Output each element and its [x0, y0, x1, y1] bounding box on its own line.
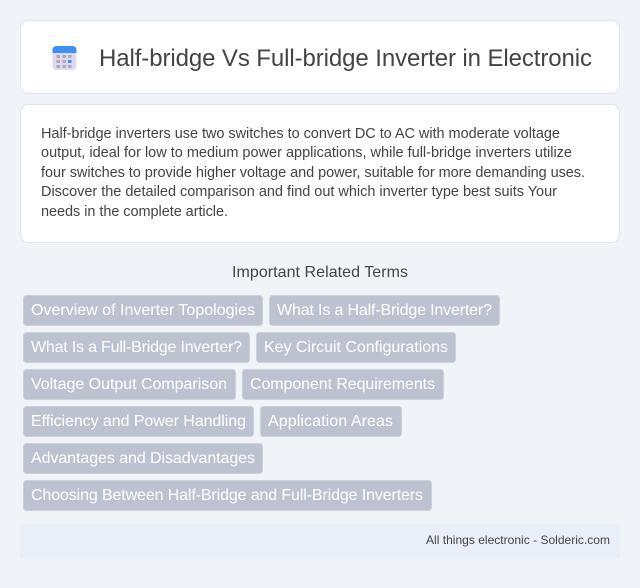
tag list: related terms [24, 296, 500, 510]
tag [270, 296, 500, 326]
title: Half-bridge Vs Full-bridge Inverter in Electronic [99, 45, 592, 72]
text block: summary paragraph: four switches to provide higher voltage and power, suitable for more demanding uses. [41, 165, 585, 181]
tag: What Is a Half-Bridge Inverter? [277, 302, 492, 319]
text block: summary paragraph: Half-bridge inverters use two switches to convert DC to AC with moderate voltage [41, 126, 560, 142]
tag: Choosing Between Half-Bridge and Full-Bridge Inverters [31, 487, 423, 504]
footer: All things electronic - Solderic.com [426, 533, 610, 547]
icon: calendar [52, 46, 76, 70]
tag: Overview of Inverter Topologies [31, 302, 255, 319]
tag: Voltage Output Comparison [31, 376, 227, 393]
tag: Application Areas [268, 413, 393, 430]
tag: Component Requirements [250, 376, 435, 393]
tag [24, 406, 254, 436]
tag [24, 332, 250, 362]
text block: summary paragraph: Discover the detailed comparison and find out which inverter type best suits Your [41, 184, 557, 200]
tag: What Is a Full-Bridge Inverter? [31, 339, 242, 356]
text block: summary paragraph: needs in the complete article. [41, 204, 228, 220]
heading: important related terms: Important Related Terms [232, 264, 408, 281]
tag [24, 480, 432, 510]
tag [24, 370, 236, 400]
tag: Efficiency and Power Handling [31, 413, 246, 430]
text block: summary paragraph [41, 126, 585, 220]
text block: summary paragraph: output, ideal for low to medium power applications, while full-bridge inverters utilize [41, 145, 572, 161]
panel: title header [20, 20, 620, 94]
tag [256, 332, 456, 362]
tag [24, 444, 262, 474]
tag: Key Circuit Configurations [264, 339, 448, 356]
tag [260, 406, 402, 436]
footer [20, 524, 620, 558]
panel: summary [20, 104, 620, 242]
tag [242, 370, 444, 400]
tag: Advantages and Disadvantages [31, 450, 255, 467]
tag [24, 296, 262, 326]
